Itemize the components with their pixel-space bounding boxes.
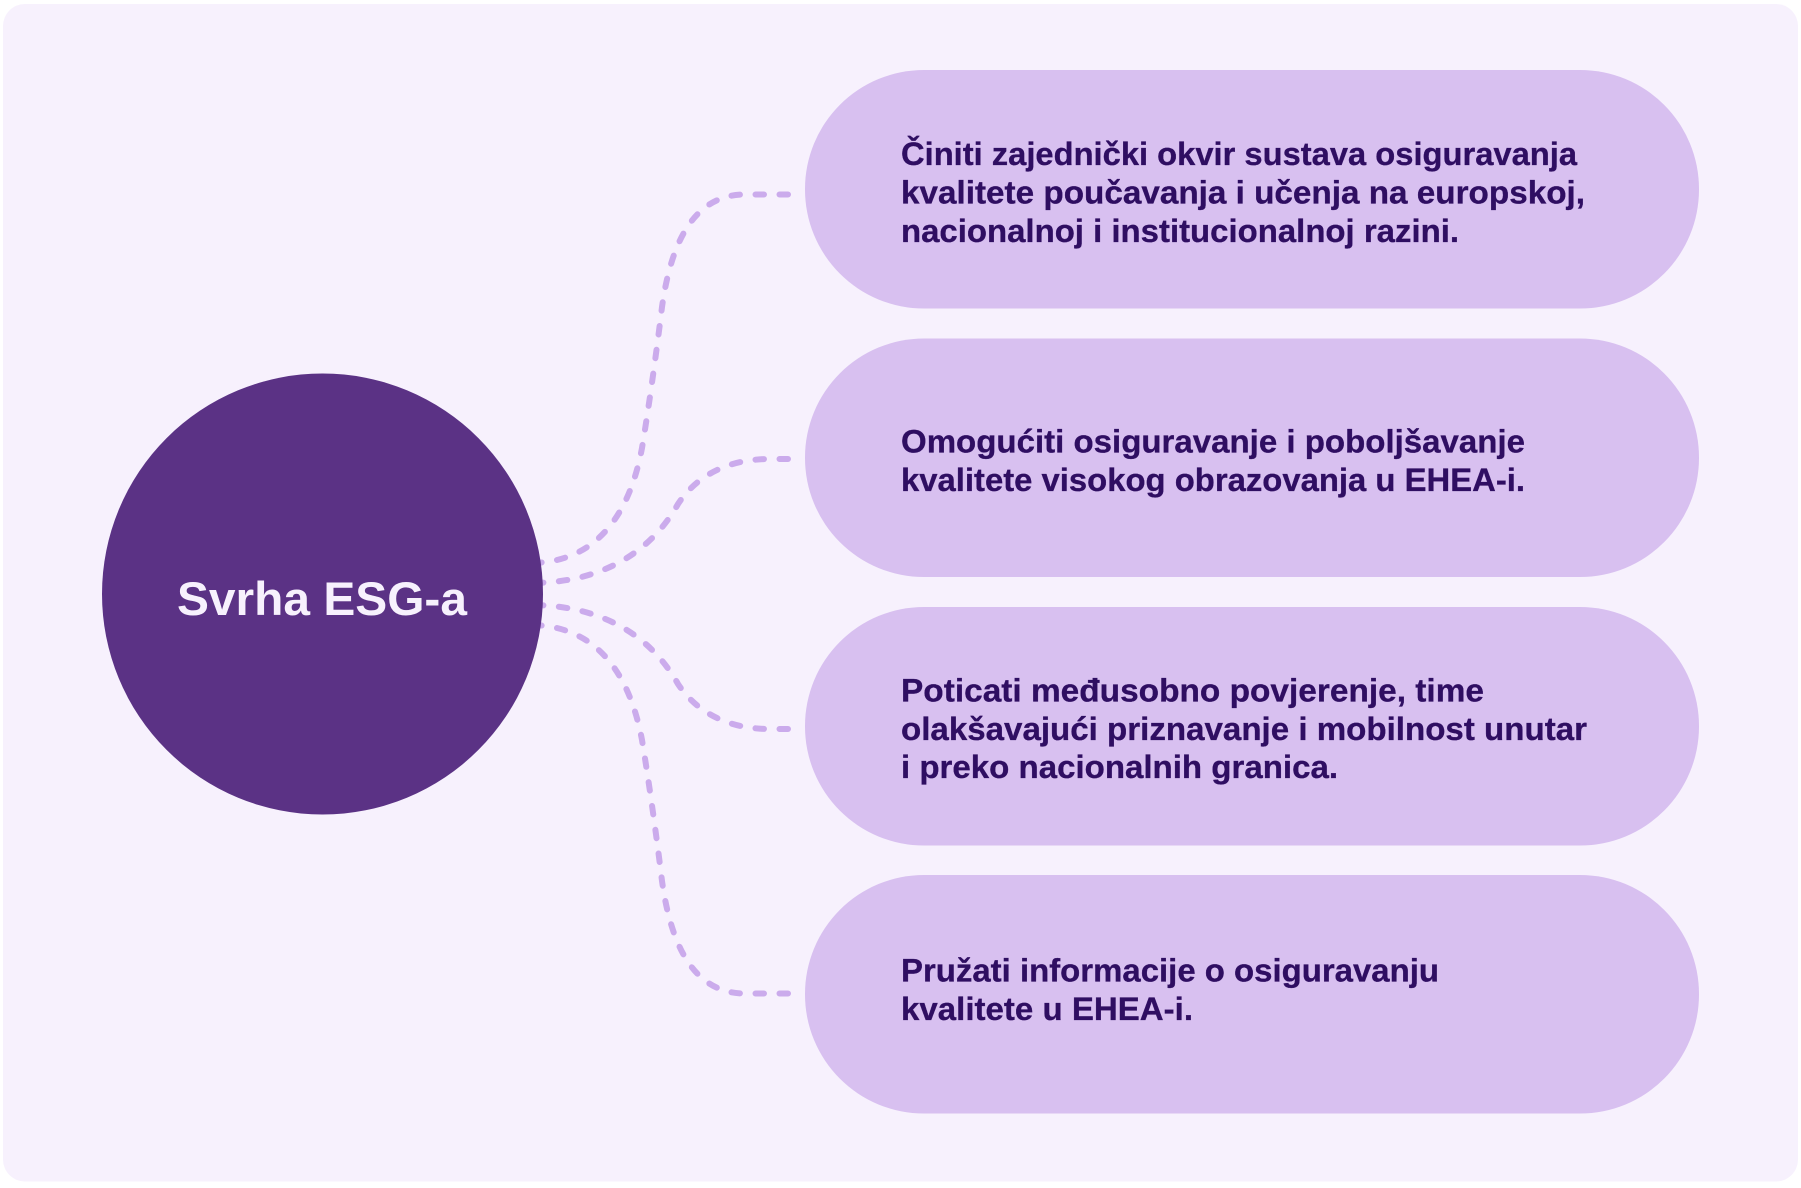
- pill 4 text: [901, 952, 1439, 1027]
- pill 1 text: nacionalnoj i institucionalnoj razini.: [901, 213, 1459, 249]
- pill 3 text: olakšavajući priznavanje i mobilnost unutar: [901, 711, 1587, 747]
- circle title: Svrha ESG-a: [177, 572, 468, 625]
- central circle: [102, 374, 543, 814]
- pill 3 text: Poticati međusobno povjerenje, time: [901, 672, 1484, 708]
- pill 1 text: kvalitete poučavanja i učenja na europskoj,: [901, 174, 1585, 210]
- pill 2 text: [901, 424, 1525, 498]
- connectors from circle to pills: [530, 194, 788, 994]
- pill 3 text: i preko nacionalnih granica.: [901, 749, 1338, 785]
- pill 1 text: Činiti zajednički okvir sustava osiguravanja: [901, 136, 1577, 172]
- pill 2: [805, 338, 1699, 577]
- pill 3 text: [901, 672, 1587, 785]
- pill 1: [805, 70, 1699, 308]
- pill 4 text: kvalitete u EHEA-i.: [901, 991, 1193, 1027]
- pill 2 text: kvalitete visokog obrazovanja u EHEA-i.: [901, 462, 1525, 498]
- pill 1 text: [901, 136, 1585, 249]
- connector 2: [530, 459, 788, 583]
- pill 4: [805, 875, 1699, 1114]
- pill 3: [805, 607, 1699, 846]
- pill 2 text: Omogućiti osiguravanje i poboljšavanje: [901, 424, 1525, 460]
- connector 3: [530, 605, 788, 729]
- connector 4: [530, 625, 788, 994]
- connector 1: [530, 194, 788, 563]
- pill 4 text: Pružati informacije o osiguravanju: [901, 952, 1439, 988]
